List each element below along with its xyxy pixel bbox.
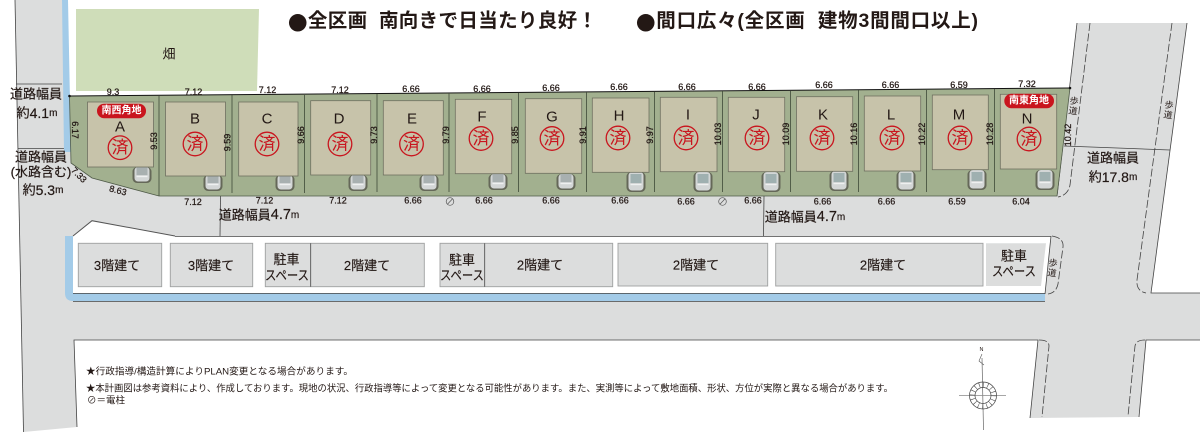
lot F xyxy=(455,99,512,190)
lot L: 済 xyxy=(884,128,900,148)
sidewalk labels: 道 xyxy=(1068,104,1078,117)
lot N: N xyxy=(1022,110,1032,128)
lot E xyxy=(383,101,443,191)
compass xyxy=(959,347,1006,430)
building 4: 駐車 xyxy=(449,252,475,268)
side dimensions xyxy=(69,121,1073,197)
side dimensions: 9.85 xyxy=(510,126,520,144)
side dimensions: 10.42 xyxy=(1063,124,1073,146)
building 5: 2階建て xyxy=(673,258,719,272)
title: ●全区画 南向きで日当たり良好！ xyxy=(288,6,597,36)
building 6 xyxy=(776,243,983,286)
side dimensions: 9.53 xyxy=(149,132,159,150)
building 3: 駐車 xyxy=(273,252,300,267)
top dimensions: 6.66 xyxy=(542,83,560,93)
road width labels: 約5.3m xyxy=(23,182,63,198)
lot A xyxy=(88,102,154,183)
sidewalk labels: 道 xyxy=(1163,108,1173,121)
side dimensions: 10.09 xyxy=(781,123,791,145)
water channel xyxy=(62,0,71,152)
title: ●間口広々(全区画 建物3間間口以上) xyxy=(636,6,978,36)
bottom dimensions xyxy=(184,196,1030,207)
parking space: 駐車 xyxy=(1001,248,1027,264)
sidewalk labels: 道 xyxy=(1047,266,1057,279)
bottom dimensions: 7.12 xyxy=(256,196,273,206)
top dimensions: 6.66 xyxy=(402,84,420,94)
top dimensions: 6.66 xyxy=(473,84,491,94)
side dimensions: 9.91 xyxy=(578,126,588,144)
lot H: 済 xyxy=(610,128,626,148)
bottom dimensions: 7.12 xyxy=(329,196,347,206)
lot A: A xyxy=(115,118,125,136)
top dimensions: 6.66 xyxy=(748,82,766,92)
lot J xyxy=(728,97,785,192)
lot N xyxy=(1000,94,1057,190)
top dimensions: 7.12 xyxy=(185,87,202,97)
field: 畑 xyxy=(162,46,176,62)
side dimensions: 8.63 xyxy=(108,184,128,197)
lot B: 済 xyxy=(186,134,204,154)
lot E: E xyxy=(407,110,417,128)
lot C: 済 xyxy=(258,134,276,154)
bottom dimensions: 6.66 xyxy=(677,196,695,206)
lot M: 済 xyxy=(952,128,968,148)
side dimensions: 9.66 xyxy=(296,126,306,144)
bottom dimensions: 6.66 xyxy=(611,196,629,206)
lot L xyxy=(864,96,921,191)
site plan xyxy=(68,87,1071,196)
road width labels: 道路幅員 xyxy=(10,86,62,102)
top dimensions: 7.32 xyxy=(1018,79,1036,89)
building 4: 2階建て xyxy=(517,258,563,272)
top dimensions: 6.66 xyxy=(815,80,833,90)
lower block xyxy=(65,221,1063,302)
parking space xyxy=(986,243,1046,286)
lot I xyxy=(660,97,717,192)
road width labels xyxy=(10,86,1139,225)
road width labels: 道路幅員 xyxy=(1087,150,1139,166)
building 3 xyxy=(265,243,424,287)
notes: ★本計画図は参考資料により、作成しております。現地の状況、行政指導等によって変更となる可能性があります。また、実測等によって敷地面積、形状、方位が実際と異なる場合があります。 xyxy=(86,382,893,394)
sidewalk labels: 歩 xyxy=(1048,256,1058,269)
lot J: J xyxy=(752,106,760,124)
bottom dimensions: 6.66 xyxy=(542,196,560,206)
building 3: スペース xyxy=(265,268,309,283)
lot D: 済 xyxy=(332,134,348,154)
top dimensions: 6.66 xyxy=(882,80,899,90)
road width labels: 道路幅員4.7m xyxy=(219,207,299,223)
lot F: F xyxy=(477,108,487,126)
bottom dimensions: 6.66 xyxy=(814,196,831,206)
bottom dimensions: 6.66 xyxy=(404,196,422,206)
lot K xyxy=(796,97,853,191)
lot D xyxy=(311,101,371,191)
utility pole markers xyxy=(446,198,726,205)
lot G: G xyxy=(546,108,558,126)
lot H xyxy=(592,98,649,192)
lot B: B xyxy=(190,110,200,128)
top dimensions: 6.59 xyxy=(950,80,968,90)
lot D: D xyxy=(334,110,345,128)
lot H: H xyxy=(614,108,624,124)
bottom dimensions: 6.66 xyxy=(475,196,493,206)
notes: ⊘＝電柱 xyxy=(87,394,126,406)
lot J: 済 xyxy=(748,128,766,148)
lot K: 済 xyxy=(814,128,830,148)
lot A: 南西角地 xyxy=(102,104,142,116)
road width labels: 約17.8m xyxy=(1089,169,1137,185)
building 2 xyxy=(170,243,253,287)
lot A: 済 xyxy=(112,138,128,157)
bottom dimensions: 6.66 xyxy=(744,196,762,206)
building 1 xyxy=(78,243,162,287)
side dimensions: 10.28 xyxy=(985,123,995,145)
top dimensions: 6.66 xyxy=(678,82,696,92)
side dimensions: 9.59 xyxy=(222,134,232,151)
building 6: 2階建て xyxy=(860,258,906,272)
bottom dimensions: 6.04 xyxy=(1012,196,1030,206)
title xyxy=(288,6,978,36)
side dimensions: 9.97 xyxy=(645,126,655,144)
bottom dimensions: 7.12 xyxy=(184,197,202,207)
bottom dimensions: 6.66 xyxy=(878,196,895,206)
building 4: スペース xyxy=(440,268,484,283)
top dimensions xyxy=(107,79,1036,97)
side dimensions: 7.33 xyxy=(69,165,89,185)
side dimensions: 9.73 xyxy=(369,126,379,144)
lot G: 済 xyxy=(544,129,560,148)
sidewalk labels: 歩 xyxy=(1164,98,1174,111)
side dimensions: 10.16 xyxy=(849,123,859,145)
lot N: 南東角地 xyxy=(1009,94,1049,106)
parking space: スペース xyxy=(992,264,1036,279)
top dimensions: 7.12 xyxy=(331,85,349,95)
lot I: 済 xyxy=(678,128,694,148)
side dimensions: 9.79 xyxy=(441,126,451,144)
top dimensions: 9.3 xyxy=(107,87,119,97)
notes: ★行政指導/構造計算によりPLAN変更となる場合があります。 xyxy=(86,366,353,378)
side dimensions: 10.22 xyxy=(917,123,927,145)
road width labels: (水路含む) xyxy=(11,164,71,180)
bottom dimensions: 6.59 xyxy=(948,196,966,206)
lot M: M xyxy=(953,106,965,124)
lot C: C xyxy=(262,110,273,128)
side dimensions: 6.17 xyxy=(70,121,80,139)
field xyxy=(76,9,259,91)
road width labels: 道路幅員4.7m xyxy=(765,209,845,225)
lot B xyxy=(166,102,226,191)
notes xyxy=(86,366,893,406)
side dimensions: 10.03 xyxy=(713,123,723,145)
lot M xyxy=(932,95,988,190)
building 3: 2階建て xyxy=(344,258,390,273)
building 2: 3階建て xyxy=(188,258,234,273)
lot K: K xyxy=(818,106,828,124)
compass: N xyxy=(980,347,984,353)
road width labels: 約4.1m xyxy=(17,105,57,121)
lot I: I xyxy=(686,106,690,124)
road width labels: 道路幅員 xyxy=(15,150,67,164)
lot L: L xyxy=(887,106,895,124)
lot G xyxy=(525,99,582,190)
top dimensions: 7.12 xyxy=(259,85,276,95)
sidewalk labels: 歩 xyxy=(1069,94,1079,107)
lot N: 済 xyxy=(1020,130,1038,148)
sidewalk labels xyxy=(1047,94,1174,279)
top dimensions: 6.66 xyxy=(610,82,628,92)
lot C xyxy=(239,102,298,191)
building 5 xyxy=(618,243,768,286)
lot F: 済 xyxy=(472,129,490,148)
building 1: 3階建て xyxy=(94,258,140,273)
building 4 xyxy=(440,243,613,287)
lot E: 済 xyxy=(403,134,420,154)
